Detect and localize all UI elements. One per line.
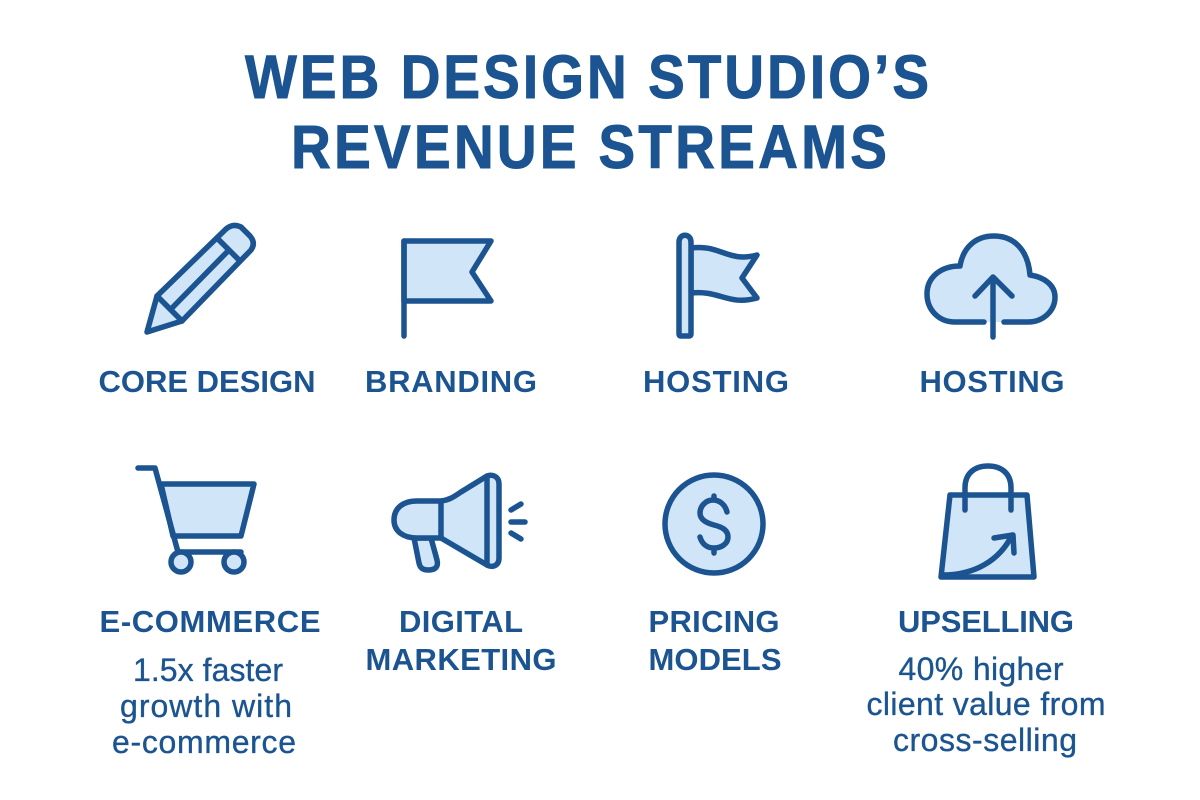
icon: shopping cart	[138, 468, 254, 572]
label: branding: BRANDING	[365, 364, 537, 399]
title: REVENUE STREAMS	[291, 113, 887, 182]
label: e-commerce: E-COMMERCE	[100, 604, 320, 639]
text: e-commerce stat: e-commerce	[112, 724, 296, 760]
label: pricing models	[648, 604, 782, 677]
icon: megaphone	[394, 475, 525, 570]
icon: flag	[404, 241, 491, 336]
label: hosting: HOSTING	[643, 364, 789, 399]
icon: shopping bag	[941, 466, 1034, 577]
title: WEB DESIGN STUDIO’S	[245, 43, 929, 112]
text: upselling stat	[866, 651, 1106, 758]
text: upselling stat: 40% higher	[898, 651, 1064, 687]
label: digital marketing: MARKETING	[366, 642, 556, 677]
text: e-commerce stat: growth with	[120, 688, 292, 724]
label: core design: CORE DESIGN	[98, 364, 316, 399]
label: digital marketing: DIGITAL	[399, 604, 523, 639]
text: upselling stat: cross-selling	[893, 722, 1077, 758]
label: digital marketing	[366, 604, 556, 677]
label: pricing models: MODELS	[648, 642, 782, 677]
text: e-commerce stat	[112, 652, 296, 760]
text: e-commerce stat: 1.5x faster	[133, 652, 283, 688]
label: hosting: HOSTING	[920, 364, 1064, 399]
label: upselling: UPSELLING	[898, 604, 1074, 639]
icon: cloud upload	[927, 236, 1055, 337]
icon: waving flag	[679, 235, 757, 336]
text: upselling stat: client value from	[866, 686, 1106, 722]
label: pricing models: PRICING	[648, 604, 780, 639]
icon: pencil	[147, 225, 253, 332]
icon: dollar coin	[665, 475, 763, 573]
title	[245, 43, 929, 182]
